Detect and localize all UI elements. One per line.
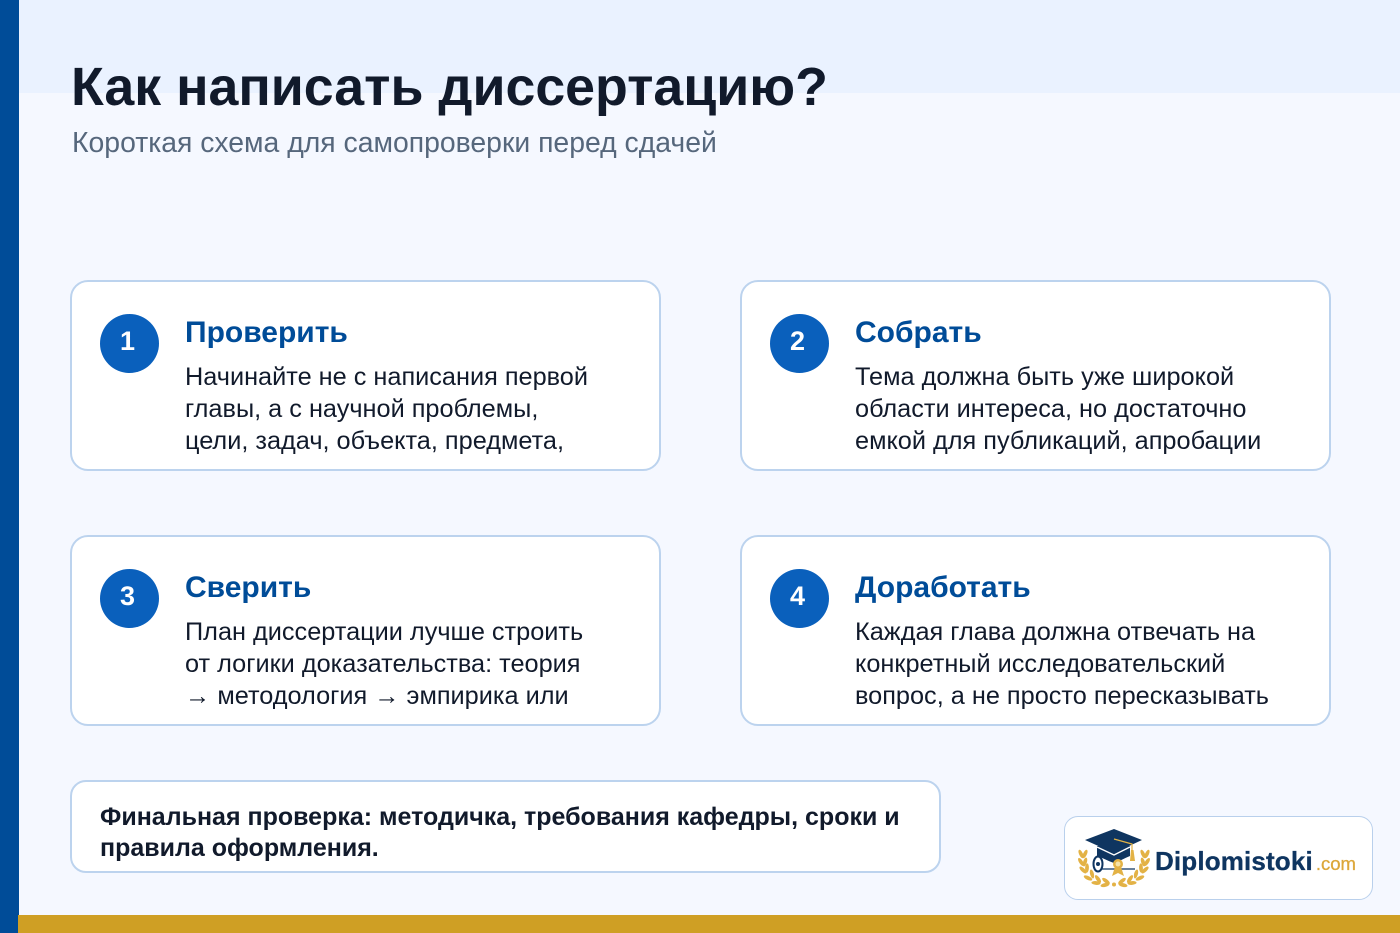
- step 2 text: [855, 363, 1261, 455]
- callout text: правила оформления.: [100, 834, 379, 862]
- step 4 heading: Доработать: [855, 571, 1031, 604]
- step 3 text: → методология → эмпирика или: [185, 682, 569, 710]
- step 2 text: емкой для публикаций, апробации: [855, 427, 1261, 455]
- step 1 text: [185, 363, 588, 455]
- callout text: [100, 803, 900, 862]
- panel: step 3: [70, 535, 661, 726]
- step 3 text: [185, 618, 583, 710]
- step 2 number: [770, 314, 829, 373]
- step 3 number: [100, 569, 159, 628]
- step 2 heading: Собрать: [855, 316, 982, 349]
- step 1 number: 1: [120, 326, 135, 356]
- panel: step 4: [740, 535, 1331, 726]
- step 1 text: цели, задач, объекта, предмета,: [185, 427, 564, 455]
- step 4 text: конкретный исследовательский: [855, 650, 1225, 678]
- step 4 text: вопрос, а не просто пересказывать: [855, 682, 1269, 710]
- step 3 heading: Сверить: [185, 571, 311, 604]
- bottom accent bar: [18, 915, 1400, 933]
- logo card: [1064, 816, 1373, 900]
- callout: final check: [70, 780, 941, 873]
- step 1 number: [100, 314, 159, 373]
- step 4 text: Каждая глава должна отвечать на: [855, 618, 1255, 646]
- step 1 text: главы, а с научной проблемы,: [185, 395, 538, 423]
- panel: step 1: [70, 280, 661, 471]
- icon: graduation cap with laurel: [1078, 829, 1150, 888]
- title: Как написать диссертацию?: [71, 57, 828, 117]
- step 4 number: [770, 569, 829, 628]
- step 3 text: от логики доказательства: теория: [185, 650, 580, 678]
- logo wordmark: Diplomistoki.com: [1155, 846, 1356, 876]
- step 2 text: Тема должна быть уже широкой: [855, 363, 1234, 391]
- header band: [18, 0, 1400, 93]
- step 3 text: План диссертации лучше строить: [185, 618, 583, 646]
- step 2 number: 2: [790, 326, 805, 356]
- step 4 number: 4: [790, 581, 805, 611]
- callout text: Финальная проверка: методичка, требования кафедры, сроки и: [100, 803, 900, 831]
- step 1 heading: Проверить: [185, 316, 348, 349]
- subtitle: Короткая схема для самопроверки перед сдачей: [72, 127, 717, 159]
- step 3 number: 3: [120, 581, 135, 611]
- left accent bar: [0, 0, 19, 933]
- panel: step 2: [740, 280, 1331, 471]
- step 4 text: [855, 618, 1269, 710]
- step 2 text: области интереса, но достаточно: [855, 395, 1246, 423]
- step 1 text: Начинайте не с написания первой: [185, 363, 588, 391]
